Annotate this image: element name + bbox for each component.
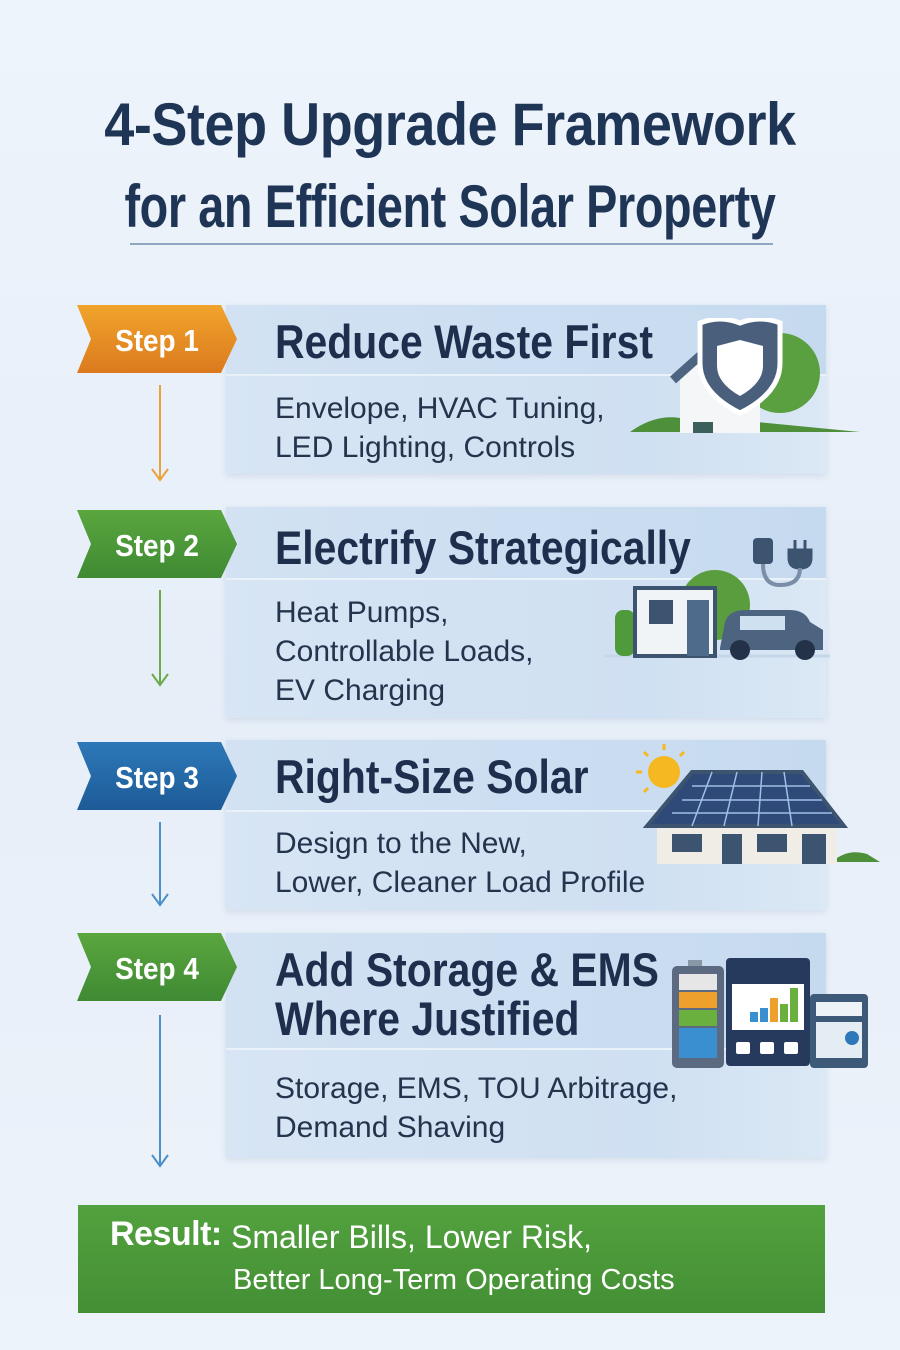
body step 2: EV Charging (275, 674, 445, 707)
arrow 2 (151, 590, 169, 687)
heading step 2: Electrify Strategically (275, 521, 691, 574)
arrow 1 (151, 385, 169, 482)
body step 3: Design to the New, (275, 827, 527, 860)
badge: step 4 (77, 933, 237, 1001)
result box (78, 1205, 825, 1313)
panel: step 2 (226, 507, 826, 718)
body step 4: Storage, EMS, TOU Arbitrage, (275, 1072, 677, 1105)
badge: step 2 (77, 510, 237, 578)
body step 1: Envelope, HVAC Tuning, (275, 392, 605, 425)
badge: step 3 (77, 742, 237, 810)
heading step 4: Add Storage & EMS (275, 943, 659, 996)
title: for an Efficient Solar Property (124, 173, 776, 240)
icon: solar house (636, 744, 880, 864)
badge: step 2: Step 2 (115, 529, 199, 563)
title: 4-Step Upgrade Framework (104, 91, 796, 158)
heading step 4 (275, 943, 659, 1045)
panel: step 3 (226, 740, 826, 910)
result box: Result: (110, 1215, 222, 1253)
icon: house with shield (630, 318, 860, 433)
badge: step 1 (77, 305, 237, 373)
arrow 3 (151, 822, 169, 907)
body step 1: LED Lighting, Controls (275, 431, 575, 464)
arrow 4 (151, 1015, 169, 1168)
body step 4: Demand Shaving (275, 1111, 505, 1144)
body step 2: Heat Pumps, (275, 596, 448, 629)
body step 4 (275, 1072, 677, 1144)
body step 2: Controllable Loads, (275, 635, 534, 668)
result box: Better Long-Term Operating Costs (233, 1264, 675, 1296)
heading step 4: Where Justified (275, 992, 579, 1045)
panel: step 1 (226, 305, 826, 474)
title (104, 91, 796, 245)
icon: electrification (605, 538, 830, 660)
body step 2 (275, 596, 534, 707)
badge: step 4: Step 4 (115, 952, 199, 986)
body step 1 (275, 392, 605, 464)
body step 3: Lower, Cleaner Load Profile (275, 866, 645, 899)
badge: step 1: Step 1 (115, 324, 199, 358)
icon: battery, tablet, controller (672, 958, 868, 1068)
panel: step 4 (226, 933, 826, 1158)
heading step 3: Right-Size Solar (275, 750, 589, 803)
body step 3 (275, 827, 645, 899)
badge: step 3: Step 3 (115, 761, 199, 795)
result box: Smaller Bills, Lower Risk, (231, 1219, 592, 1255)
heading step 1: Reduce Waste First (275, 315, 653, 368)
